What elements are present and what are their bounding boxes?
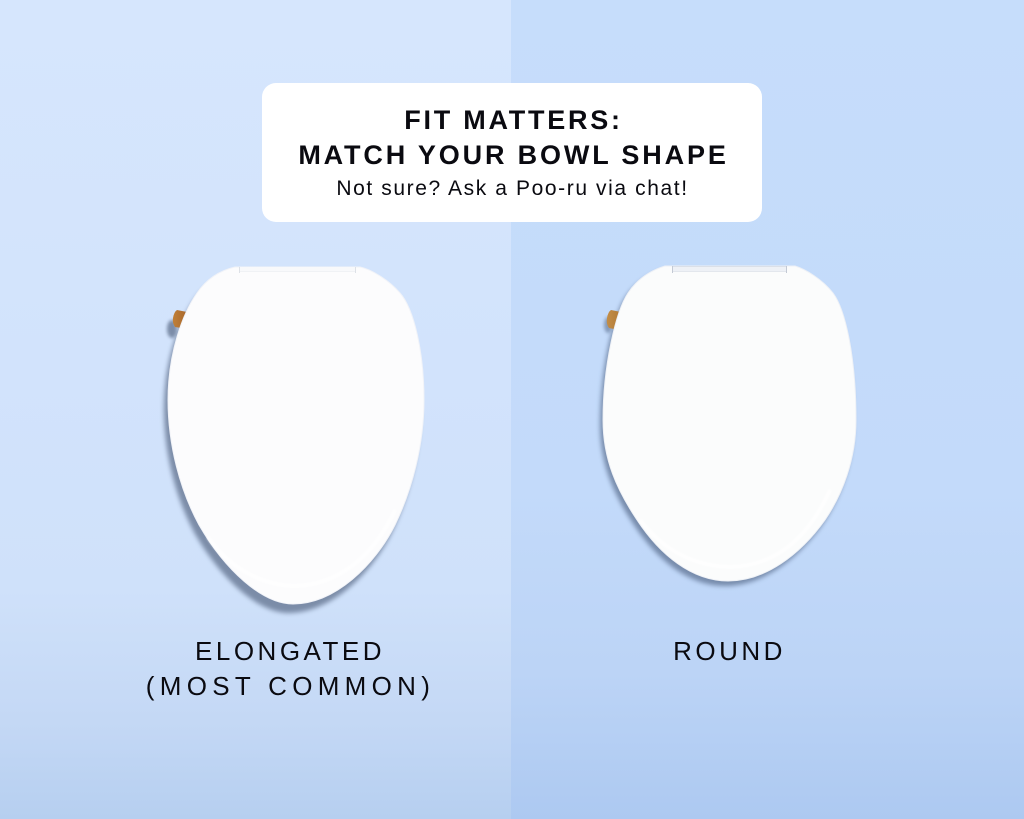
round seat body bbox=[603, 266, 856, 581]
heading line 1: FIT MATTERS: bbox=[404, 105, 623, 135]
heading line 2: MATCH YOUR BOWL SHAPE bbox=[298, 140, 729, 170]
round hinge knob bbox=[607, 310, 621, 329]
label: elongated bbox=[146, 636, 435, 701]
elongated seat inner rim bbox=[208, 510, 395, 586]
label line 2: (MOST COMMON) bbox=[146, 671, 435, 701]
elongated hinge knob bbox=[173, 310, 187, 328]
label line 1: ELONGATED bbox=[195, 636, 385, 666]
round knob shadow bbox=[604, 317, 612, 333]
round seat shadow bbox=[600, 271, 853, 586]
callout: title card bbox=[262, 83, 762, 222]
elongated seat shadow bbox=[164, 276, 420, 613]
label: round: ROUND bbox=[673, 636, 786, 666]
elongated seat body bbox=[168, 267, 424, 604]
icon: round seat bbox=[600, 266, 856, 586]
elongated hinge strip bbox=[239, 267, 356, 273]
icon: elongated seat bbox=[164, 267, 424, 613]
round hinge strip bbox=[672, 266, 787, 273]
panel: elongated background bbox=[0, 0, 511, 819]
elongated knob shadow bbox=[167, 320, 177, 338]
round seat inner rim bbox=[640, 490, 830, 567]
panel: round background bbox=[511, 0, 1024, 819]
subheading: Not sure? Ask a Poo-ru via chat! bbox=[336, 177, 689, 200]
